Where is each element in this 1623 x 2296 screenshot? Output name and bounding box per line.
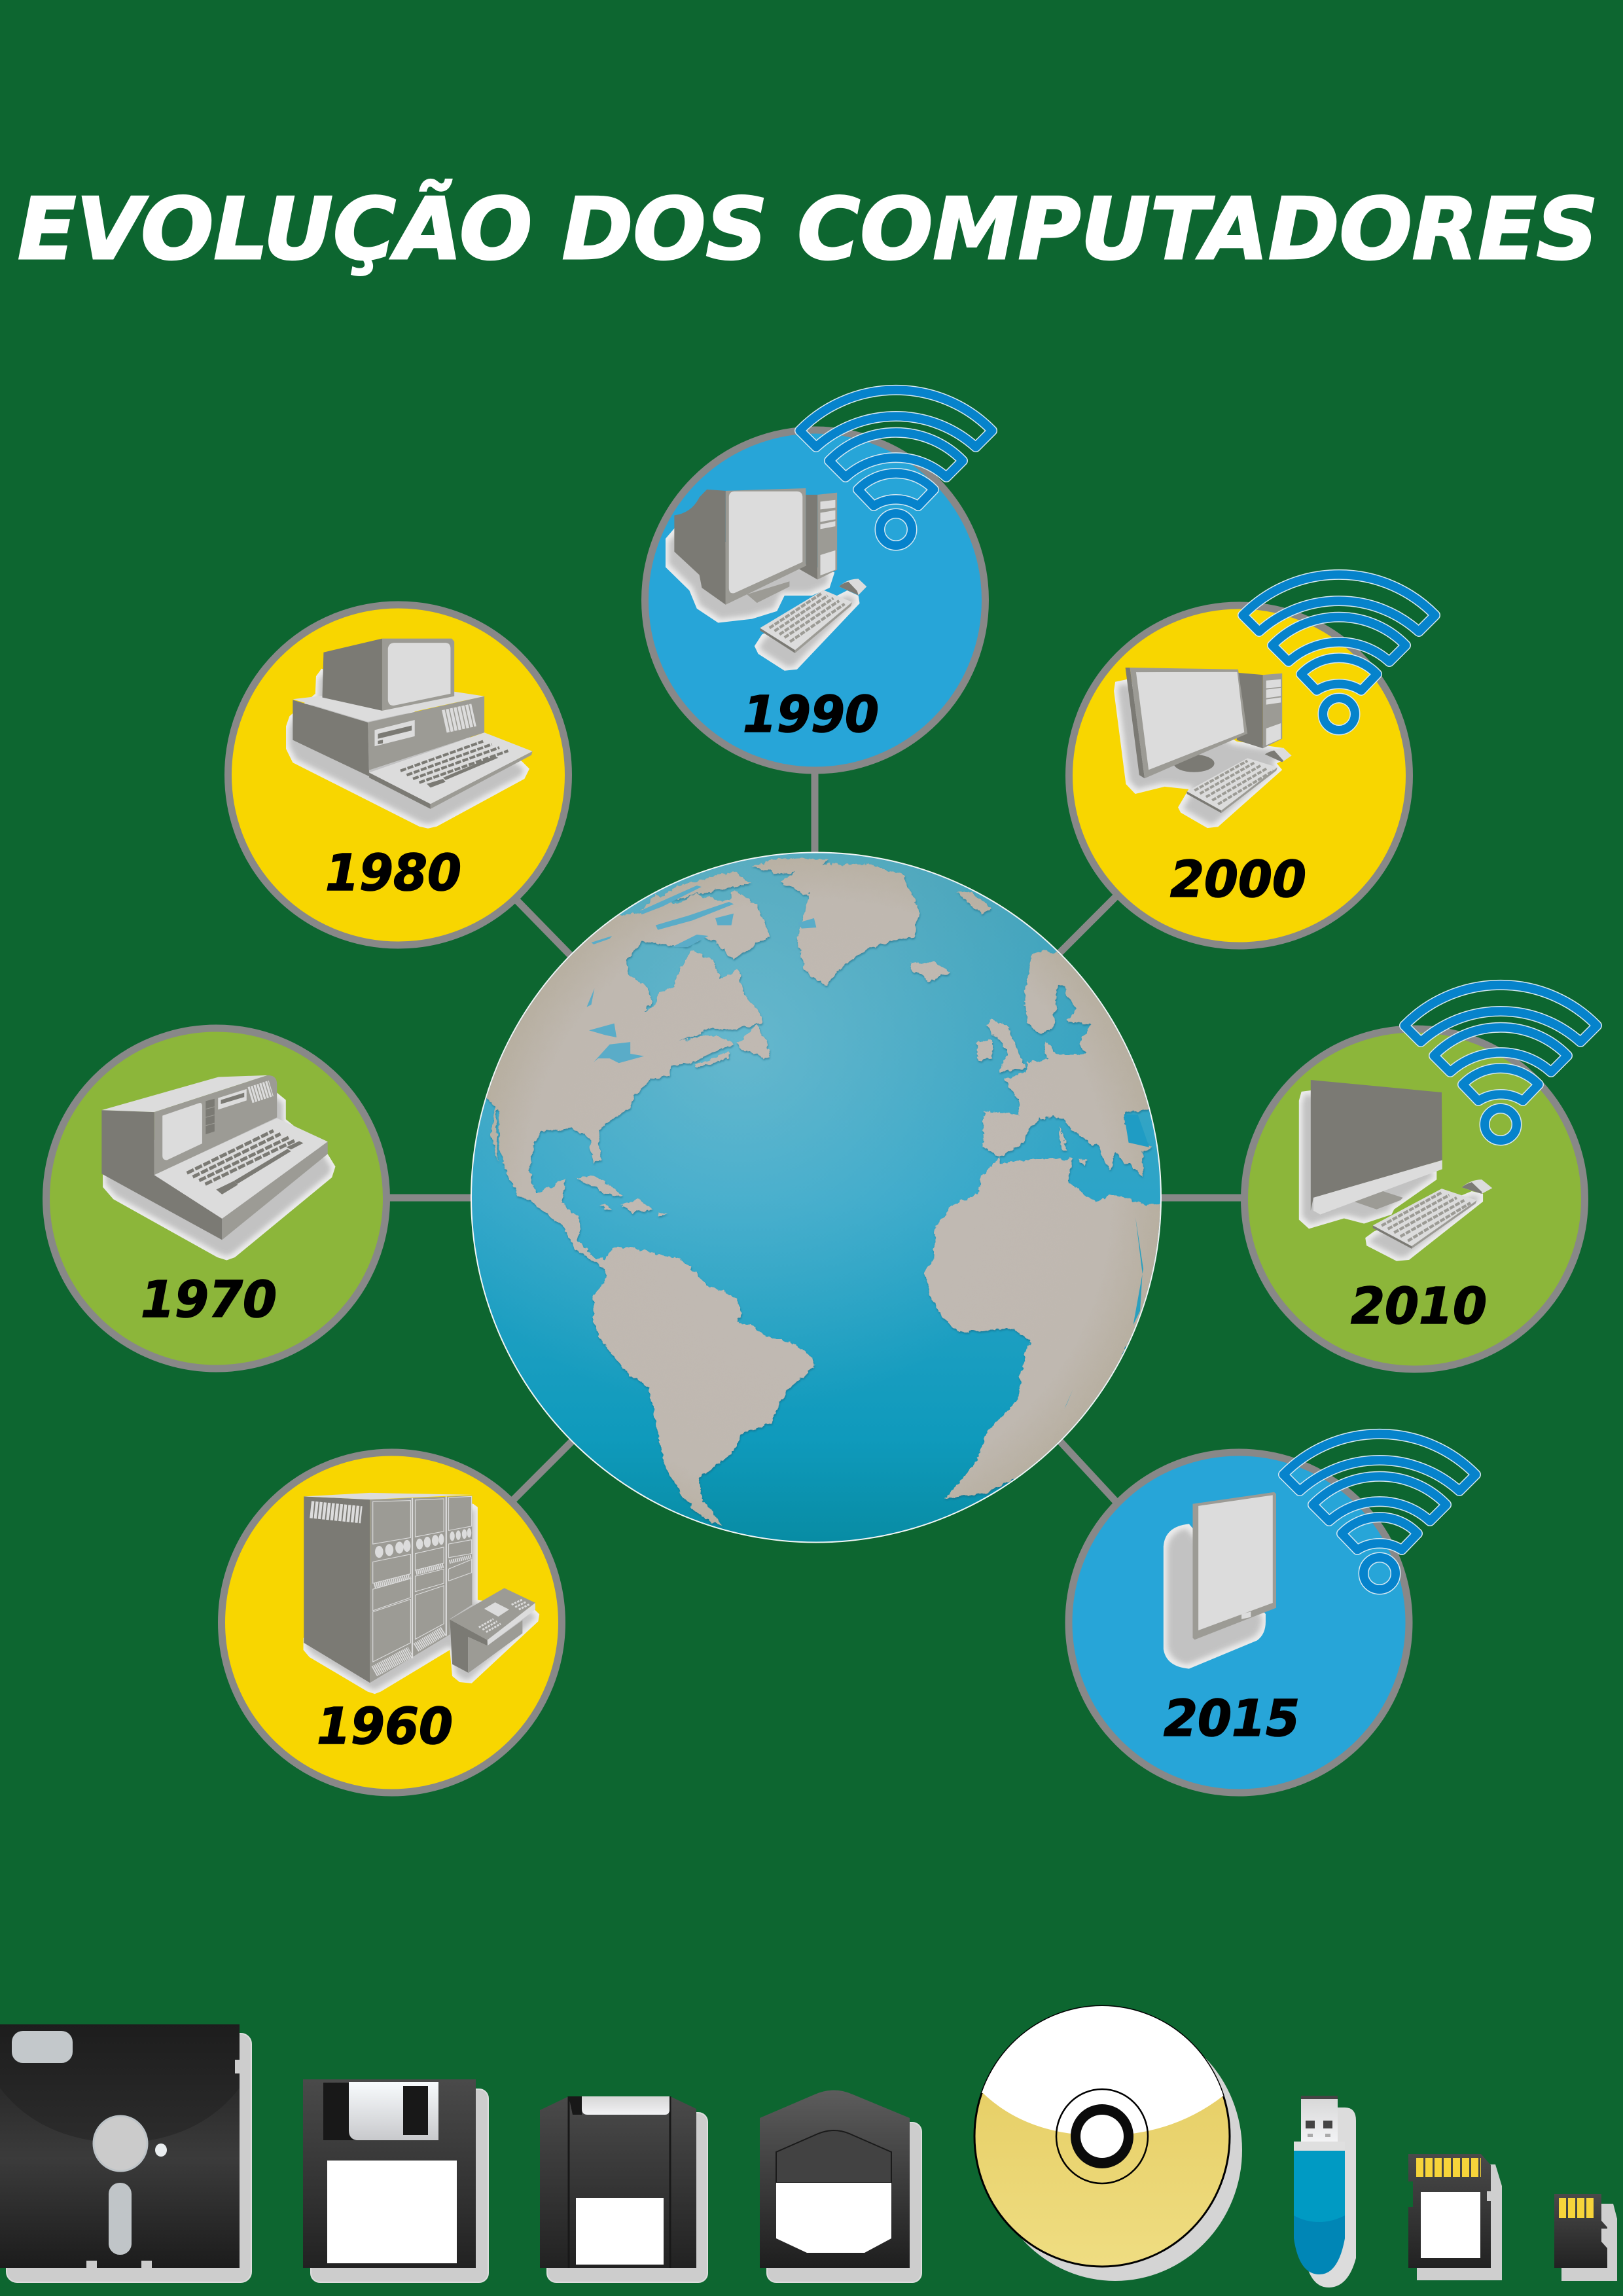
year label: 1980 <box>325 844 461 903</box>
icon: wifi signal <box>1283 1434 1476 1589</box>
icon: 1970 terminal computer <box>101 1075 335 1260</box>
icon: wifi signal <box>800 390 992 546</box>
connectors between globe and year circles <box>386 769 1243 1501</box>
icon: 1960 mainframe <box>304 1493 539 1694</box>
icon: 1980 personal computer <box>286 639 533 829</box>
icon: 1990 desktop computer <box>666 488 866 671</box>
continents <box>486 857 1160 1526</box>
year label: 1960 <box>317 1698 453 1756</box>
icon: 3.5-inch floppy disk <box>303 2079 488 2282</box>
icon: 2010 all-in-one computer <box>1299 1080 1492 1261</box>
circle: 2010 <box>1245 985 1597 1369</box>
circle: 2000 <box>1069 575 1435 946</box>
year label: 2015 <box>1164 1690 1300 1748</box>
icon: 2015 tablet <box>1164 1492 1276 1669</box>
icon: compact disc <box>969 2003 1242 2281</box>
icon: 8-inch floppy disk <box>0 2024 251 2282</box>
storage media row <box>0 2003 1617 2287</box>
title: EVOLUÇÃO DOS COMPUTADORES <box>18 179 1598 279</box>
icon: USB flash drive <box>1294 2096 1356 2287</box>
circle: 1990 <box>645 390 992 770</box>
inland waters <box>586 886 1149 1409</box>
year label: 2010 <box>1351 1278 1487 1336</box>
icon: 2000 flat-screen desktop <box>1114 668 1292 828</box>
icon: microSD card <box>1554 2194 1617 2281</box>
circle: 1970 <box>46 1028 386 1369</box>
icon: wifi signal <box>1404 985 1597 1140</box>
globe <box>449 852 1202 1543</box>
icon: wifi signal <box>1243 575 1435 730</box>
year label: 1990 <box>743 686 879 744</box>
circle: 1960 <box>221 1452 562 1793</box>
circle: 2015 <box>1069 1434 1476 1793</box>
icon: SD card <box>1408 2154 1502 2280</box>
circle: 1980 <box>228 605 568 945</box>
icon: zip disk <box>540 2096 707 2282</box>
year label: 2000 <box>1170 851 1306 909</box>
icon: memory card <box>760 2090 921 2282</box>
year label: 1970 <box>141 1271 277 1329</box>
